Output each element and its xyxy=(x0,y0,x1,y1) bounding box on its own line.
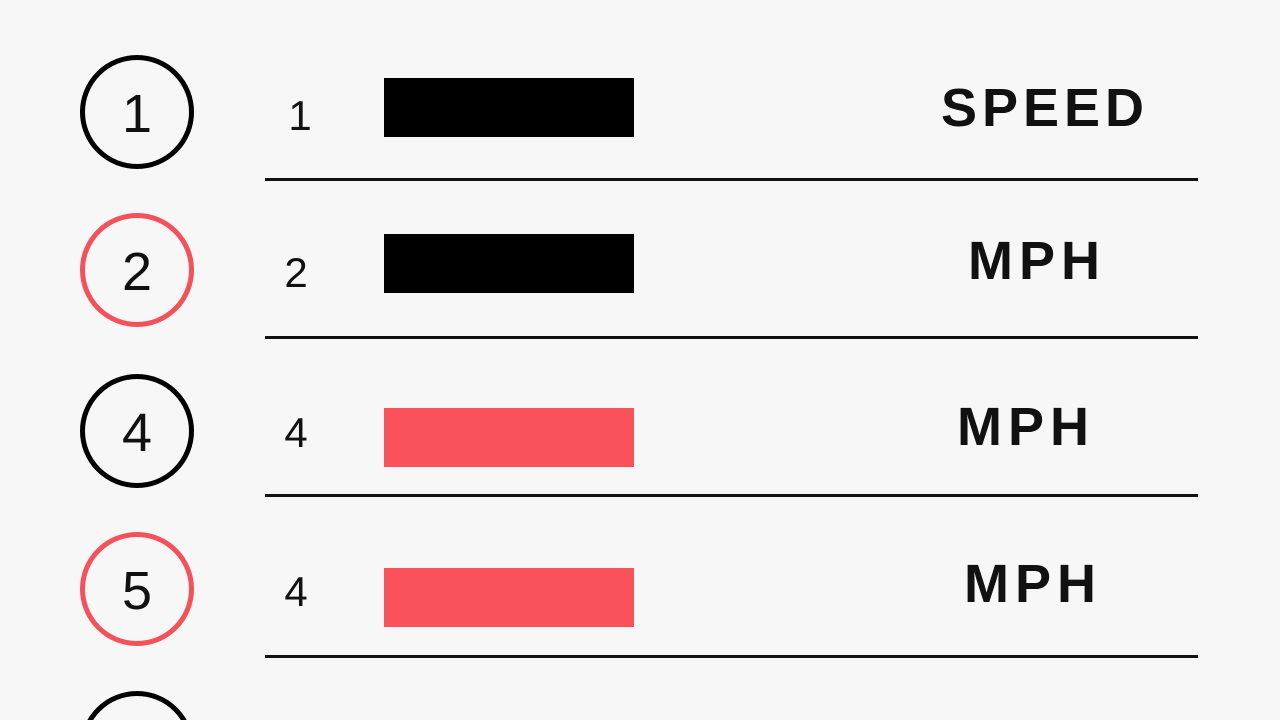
bar 2 xyxy=(384,234,634,293)
bar 3 xyxy=(384,408,634,467)
circle 2: 2 xyxy=(122,242,152,302)
bar 1 xyxy=(384,78,634,137)
circle 4: 4 xyxy=(122,403,152,463)
circle 2 xyxy=(80,213,194,327)
label MPH row 2: MPH xyxy=(968,231,1106,291)
number 1: 1 xyxy=(288,92,312,139)
circle 1: 1 xyxy=(122,84,152,144)
label MPH row 4: MPH xyxy=(964,554,1102,614)
label MPH row 3: MPH xyxy=(957,397,1095,457)
circle 6 partial xyxy=(87,691,187,720)
number 4: 4 xyxy=(284,409,308,456)
circle 5 xyxy=(80,532,194,646)
number 2: 2 xyxy=(284,249,308,296)
label SPEED: SPEED xyxy=(941,78,1149,138)
circle 5: 5 xyxy=(122,561,152,621)
circle 1 xyxy=(80,55,194,169)
bar 4 xyxy=(384,568,634,627)
number 4 row 4: 4 xyxy=(284,568,308,615)
circle 4 xyxy=(80,374,194,488)
